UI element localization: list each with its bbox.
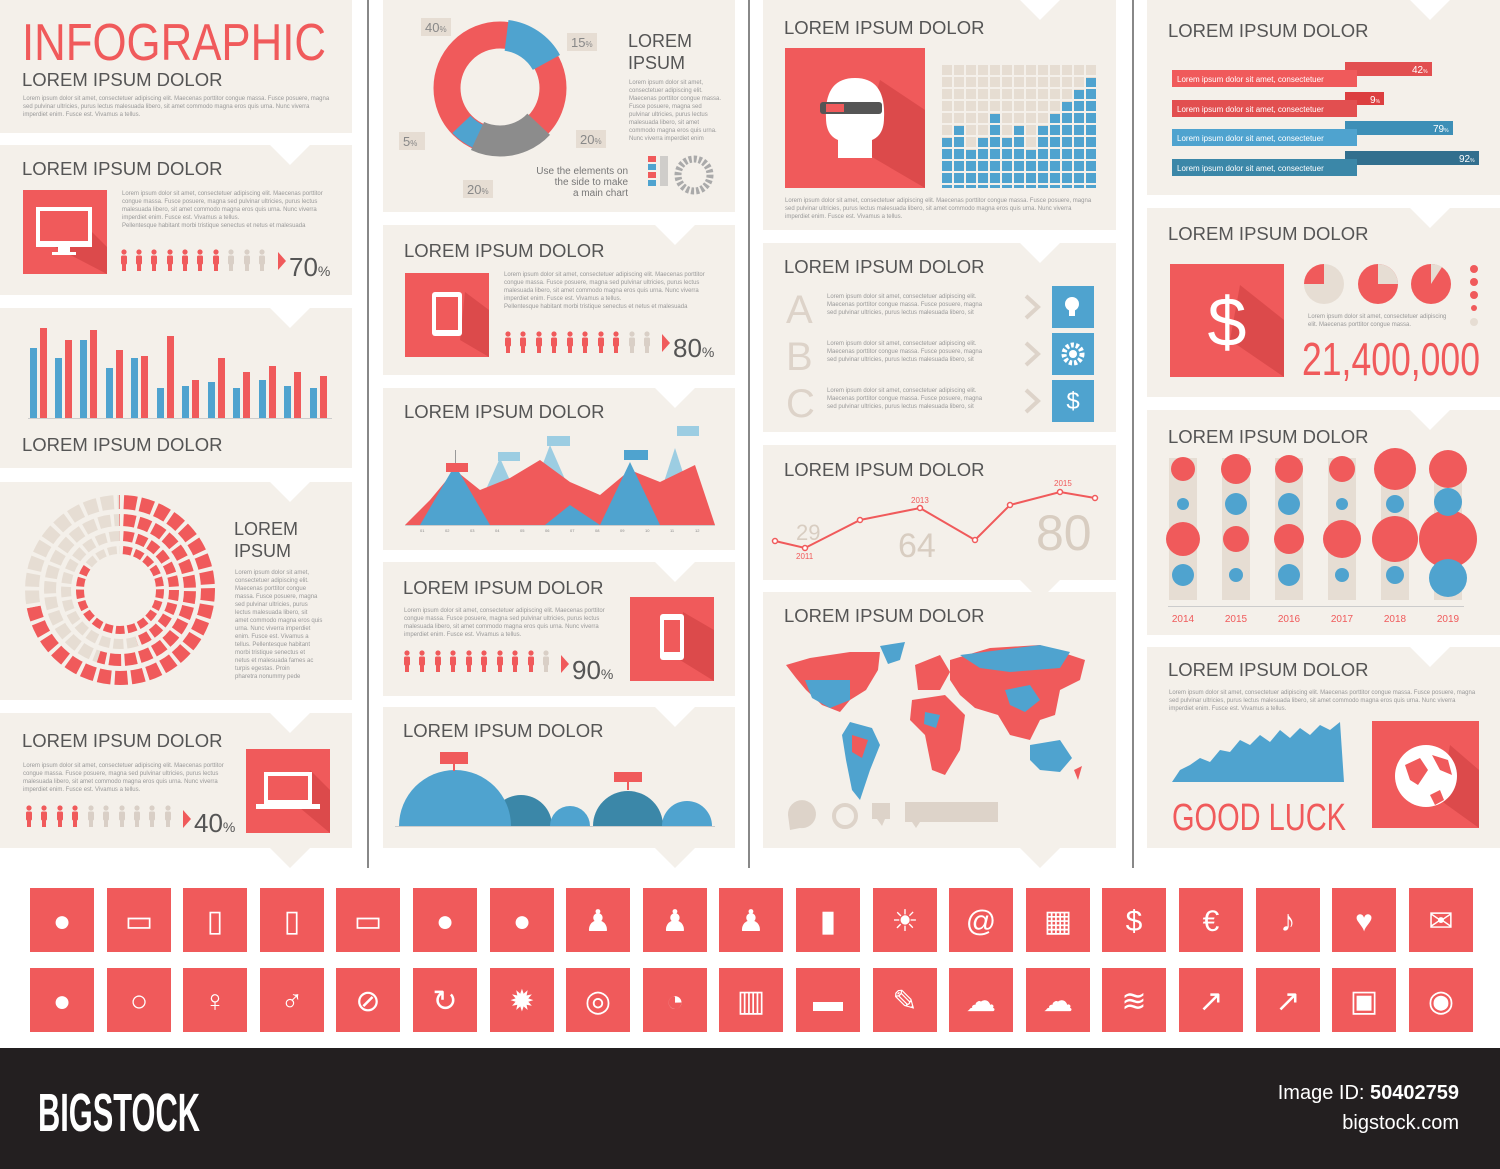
icon grid: row 1: ♥	[1355, 905, 1373, 938]
area chart: mountains: 02	[445, 528, 450, 533]
list items	[786, 286, 1094, 426]
pie charts	[1304, 264, 1478, 326]
list items: Maecenas porttitor congue massa. Fusce posuere, magna	[827, 349, 983, 355]
text block: consectetuer adipiscing elit.	[629, 88, 703, 94]
icon: tablet	[405, 273, 489, 357]
line chart: 2013	[911, 496, 929, 505]
subtitle: LOREM IPSUM DOLOR	[22, 69, 222, 90]
icon grid: row 1: ▯	[284, 905, 300, 938]
icon grid: row 1: ♟	[738, 905, 764, 938]
text block	[1308, 314, 1446, 328]
list items: Lorem ipsum dolor sit amet, consectetuer adipiscing elit.	[827, 294, 977, 300]
panel: monitor 70%	[0, 145, 352, 295]
bar list: Lorem ipsum dolor sit amet, consectetuer	[1177, 164, 1324, 173]
heading: LOREM IPSUM DOLOR	[784, 17, 984, 38]
icon grid: row 1: ●	[513, 905, 531, 938]
text block: pharetra nonummy pede	[235, 674, 301, 680]
good luck text: GOOD LUCK	[1172, 797, 1346, 839]
list items: B	[786, 335, 813, 379]
text block: malesuada libero, sit amet commodo magna eros quis urna. Nunc viverra	[23, 779, 218, 785]
mini elements	[648, 156, 710, 191]
heading: LOREM IPSUM DOLOR	[1168, 659, 1368, 680]
text block: imperdiet enim. Fusce est. Vivamus a tellus.	[23, 787, 141, 793]
text block	[785, 198, 1092, 220]
caption	[536, 166, 628, 199]
waffle chart	[942, 65, 1098, 188]
panel: hills chart	[383, 707, 735, 868]
panel: ABC list	[763, 243, 1116, 432]
bar chart	[28, 328, 332, 419]
icon grid: row 2: ▣	[1350, 985, 1378, 1018]
donut chart	[447, 35, 553, 141]
panel: world map	[763, 592, 1116, 868]
line chart: 2011	[796, 552, 814, 561]
heading: LOREM IPSUM DOLOR	[784, 459, 984, 480]
text block: Lorem ipsum dolor sit amet, consectetuer adipiscing elit. Maecenas porttitor congue massa. Fusce posuere, magna	[1169, 690, 1476, 696]
icon grid: row 1: ▭	[354, 905, 382, 938]
text block: Lorem ipsum dolor sit amet, consectetuer adipiscing elit. Maecenas porttitor	[23, 763, 224, 769]
donut labels: 15%	[571, 35, 593, 50]
text block: turpis egestas. Proin	[235, 666, 290, 672]
text block	[404, 608, 605, 638]
heading: LOREM IPSUM DOLOR	[1168, 20, 1368, 41]
bubble chart: 2016	[1278, 614, 1301, 625]
text block: Lorem ipsum dolor sit amet,	[629, 80, 703, 86]
icon grid: row 2: ◎	[585, 985, 611, 1018]
footer image id: Image ID: 50402759	[1278, 1082, 1459, 1104]
donut labels: 40%	[425, 20, 447, 35]
icon grid: row 2: ✎	[892, 985, 918, 1018]
caption: a main chart	[573, 188, 628, 199]
area chart: mountains: 12	[695, 528, 700, 533]
text block: malesuada libero, sit amet commodo magna eros quis urna. Nunc viverra	[122, 207, 317, 213]
icon grid: row 2: ♂	[281, 985, 303, 1018]
text block: morbi tristique senectus et	[235, 650, 305, 656]
text block: imperdiet enim. Fusce est. Vivamus a tellus.	[785, 214, 903, 220]
area chart: mountains: 07	[570, 528, 575, 533]
icon grid: row 1: ♟	[662, 905, 688, 938]
icon grid: row 1	[30, 888, 1473, 952]
text block: urna. Nunc viverra imperdiet	[235, 626, 311, 632]
area chart: mountains: 11	[670, 528, 675, 533]
bar list: 9%	[1370, 95, 1381, 106]
panel: dollar 21,400,000	[1147, 208, 1500, 397]
icon grid: row 2: ▥	[737, 985, 765, 1018]
list items: C	[786, 382, 815, 426]
icon grid: row 2: ⊘	[355, 985, 381, 1018]
area chart: mountains: 06	[545, 528, 550, 533]
donut labels	[399, 18, 606, 198]
text block: congue massa. Fusce posuere, magna sed pulvinar ultricies, purus lectus	[23, 771, 218, 777]
text block: congue massa. Fusce posuere, magna sed pulvinar ultricies, purus lectus	[504, 280, 699, 286]
heading: LOREM IPSUM DOLOR	[784, 256, 984, 277]
text block: Pellentesque habitant morbi tristique senectus et netus et malesuada	[122, 223, 306, 229]
text block: Lorem ipsum dolor sit amet, consectetuer adipiscing elit. Maecenas porttitor congue massa. Fusce posuere, magna	[785, 198, 1092, 204]
panel: donut chart	[383, 0, 735, 212]
people row 80%: 80%	[673, 333, 714, 363]
text block: imperdiet enim. Fusce est. Vivamus a tellus.	[404, 632, 522, 638]
body text: imperdiet enim. Fusce est. Vivamus a tellus.	[23, 112, 141, 118]
text block: imperdiet enim. Fusce est. Vivamus a tellus.	[1169, 706, 1287, 712]
bubble chart	[1166, 448, 1477, 625]
text block: amet commodo magna eros quis	[235, 618, 322, 624]
panel: concentric rings: IPSUM	[234, 541, 291, 561]
list items: sed pulvinar ultricies, purus lectus malesuada libero, sit	[827, 357, 974, 363]
icon grid: row 2: ◉	[1428, 985, 1454, 1018]
donut labels: 5%	[403, 134, 417, 149]
icon grid: row 1: ▦	[1044, 905, 1072, 938]
column dividers	[367, 0, 1134, 868]
heading: LOREM IPSUM DOLOR	[22, 434, 222, 455]
heading: LOREM IPSUM DOLOR	[22, 730, 222, 751]
icon grid: row 2	[30, 968, 1473, 1032]
icon: laptop	[246, 749, 330, 833]
icon grid: row 1: ▯	[207, 905, 223, 938]
line chart: 29	[796, 520, 820, 545]
text block: Lorem ipsum dolor sit amet, consectetuer adipiscing elit. Maecenas porttitor	[404, 608, 605, 614]
panel: bubble chart	[1147, 410, 1500, 635]
list items: $	[1066, 388, 1080, 415]
list items: Maecenas porttitor congue massa. Fusce posuere, magna	[827, 302, 983, 308]
bubble chart: 2018	[1384, 614, 1407, 625]
bubble chart: 2015	[1225, 614, 1248, 625]
caption: the side to make	[555, 177, 628, 188]
area chart: mountains: 10	[645, 528, 650, 533]
panel: bar chart	[0, 308, 352, 468]
icon grid: row 2: ✹	[509, 985, 535, 1018]
panel: phone 90%	[383, 562, 735, 696]
text block: malesuada libero, sit amet commodo magna eros quis urna. Nunc viverra	[404, 624, 599, 630]
world map	[786, 642, 1085, 800]
icon grid: row 1: ♟	[585, 905, 611, 938]
panel: head icon + waffle	[763, 0, 1116, 230]
heading: LOREM IPSUM DOLOR	[1168, 426, 1368, 447]
heading: LOREM IPSUM DOLOR	[403, 577, 603, 598]
list items: Lorem ipsum dolor sit amet, consectetuer adipiscing elit.	[827, 341, 977, 347]
bar list: 79%	[1433, 124, 1449, 135]
bar list: Lorem ipsum dolor sit amet, consectetuer	[1177, 134, 1324, 143]
text block: Lorem ipsum dolor sit amet,	[235, 570, 309, 576]
icon grid: row 2: ↗	[1198, 985, 1224, 1018]
area chart	[1172, 722, 1344, 782]
icon grid: row 1: ☀	[892, 905, 918, 938]
panel: tablet 80%	[383, 225, 735, 375]
text block: consectetuer adipiscing elit.	[235, 578, 309, 584]
text block	[235, 570, 322, 680]
icon grid: row 2: ☁	[966, 985, 996, 1018]
heading: LOREM IPSUM DOLOR	[404, 401, 604, 422]
icon grid: row 2: ☁	[1043, 985, 1073, 1018]
list items: Maecenas porttitor congue massa. Fusce posuere, magna	[827, 396, 983, 402]
text block: Lorem ipsum dolor sit amet, consectetuer adipiscing	[1308, 314, 1446, 320]
heading: LOREM	[628, 31, 692, 51]
icon: dollar: $	[1208, 283, 1246, 361]
heading: LOREM IPSUM DOLOR	[1168, 223, 1368, 244]
people row 40%	[26, 805, 235, 838]
list items: sed pulvinar ultricies, purus lectus malesuada libero, sit	[827, 404, 974, 410]
area chart: mountains	[405, 426, 715, 533]
text block: Fusce posuere, magna sed	[629, 104, 702, 110]
bar list: Lorem ipsum dolor sit amet, consectetuer	[1177, 105, 1324, 114]
text block: Pellentesque habitant morbi tristique senectus et netus et malesuada	[504, 304, 688, 310]
bubble chart: 2014	[1172, 614, 1195, 625]
icon: head with glasses	[785, 48, 925, 188]
title: INFOGRAPHIC	[22, 14, 326, 72]
donut labels: 20%	[467, 182, 489, 197]
icon grid: row 2: ○	[130, 985, 148, 1018]
heading: LOREM IPSUM DOLOR	[404, 240, 604, 261]
text block: Maecenas porttitor congue massa.	[629, 96, 721, 102]
caption: Use the elements on	[536, 166, 628, 177]
text block: tellus. Pellentesque habitant	[235, 642, 310, 648]
area chart: mountains: 05	[520, 528, 525, 533]
icon grid: row 2: ▬	[813, 985, 843, 1018]
text block: sed pulvinar ultricies, purus lectus malesuada libero, sit amet commodo magna eros quis urna. Nunc viverra	[1169, 698, 1456, 704]
text block: Lorem ipsum dolor sit amet, consectetuer adipiscing elit. Maecenas porttitor	[504, 272, 705, 278]
radial ring chart	[32, 502, 208, 678]
text block: imperdiet enim. Fusce est. Vivamus a tellus.	[122, 215, 240, 221]
text block	[122, 191, 323, 229]
bubble chart: 2019	[1437, 614, 1460, 625]
icon grid: row 1: ●	[53, 905, 71, 938]
people row 70%	[121, 249, 330, 282]
list items: A	[786, 288, 813, 332]
people row 80%	[505, 331, 714, 363]
body text	[23, 96, 330, 118]
panel: horizontal bars	[1147, 0, 1500, 195]
icon grid: row 2: ≋	[1121, 985, 1147, 1018]
text block: lectus malesuada libero, sit	[235, 610, 308, 616]
text block: malesuada libero, sit amet	[629, 120, 699, 126]
text block: congue massa. Fusce posuere, magna sed pulvinar ultricies, purus lectus	[404, 616, 599, 622]
people row 40%: 40%	[194, 808, 235, 838]
panel: donut chart: IPSUM	[628, 53, 685, 73]
text block: sed pulvinar ultricies, purus lectus malesuada libero, sit amet commodo magna eros quis urna. Nunc viverra	[785, 206, 1072, 212]
text block: netus et malesuada fames ac	[235, 658, 313, 664]
line chart	[772, 479, 1098, 565]
heading: LOREM IPSUM DOLOR	[22, 158, 222, 179]
text block	[629, 80, 721, 142]
text block: imperdiet enim. Fusce est. Vivamus a tellus.	[504, 296, 622, 302]
icon grid: row 2: ↗	[1275, 985, 1301, 1018]
heading: LOREM	[234, 519, 298, 539]
panel: infographic title	[0, 0, 352, 133]
icon grid: row 1: ●	[436, 905, 454, 938]
icon: dollar	[1170, 264, 1284, 377]
text block: Lorem ipsum dolor sit amet, consectetuer adipiscing elit. Maecenas porttitor	[122, 191, 323, 197]
text block: pulvinar ultricies, purus lectus	[629, 112, 708, 118]
text block: enim. Fusce est. Vivamus a	[235, 634, 309, 640]
text block: Maecenas porttitor congue	[235, 586, 307, 592]
bar list: 42%	[1412, 65, 1428, 76]
bubble chart: 2017	[1331, 614, 1354, 625]
text block: sed pulvinar ultricies, purus	[235, 602, 308, 608]
icon grid: row 1: ✉	[1428, 905, 1454, 938]
icon grid: row 1: @	[966, 905, 996, 938]
icon: monitor	[23, 190, 107, 274]
area chart: mountains: 01	[420, 528, 425, 533]
donut labels: 20%	[580, 132, 602, 147]
icon grid: row 2: ◔	[666, 985, 684, 1018]
icon: globe	[1372, 721, 1479, 828]
semicircle chart	[395, 752, 715, 827]
panel: mountain chart	[383, 388, 735, 550]
speech bubble icons	[788, 800, 998, 830]
bar list	[1172, 62, 1479, 176]
body text: Lorem ipsum dolor sit amet, consectetuer adipiscing elit. Maecenas porttitor congue massa. Fusce posuere, magna	[23, 96, 330, 102]
heading: LOREM IPSUM DOLOR	[784, 605, 984, 626]
bar list: 92%	[1459, 154, 1475, 165]
footer bar	[0, 1048, 1500, 1169]
panel: laptop 40%	[0, 713, 352, 868]
text block	[23, 763, 224, 793]
panel: good luck	[1147, 647, 1500, 848]
line chart: 64	[898, 527, 936, 565]
area chart: mountains: 04	[495, 528, 500, 533]
icon grid: row 1: ♪	[1280, 905, 1296, 938]
list items: Lorem ipsum dolor sit amet, consectetuer adipiscing elit.	[827, 388, 977, 394]
area chart: mountains: 03	[470, 528, 475, 533]
footer logo: BIGSTOCK	[38, 1083, 200, 1143]
icon grid: row 2: ↻	[432, 985, 458, 1018]
area chart: mountains: 08	[595, 528, 600, 533]
people row 70%: 70%	[289, 252, 330, 282]
heading: LOREM IPSUM DOLOR	[403, 720, 603, 741]
icon grid: row 2: ♀	[204, 985, 226, 1018]
icon grid: row 1: $	[1126, 905, 1143, 938]
area chart: mountains: 09	[620, 528, 625, 533]
text block	[1169, 690, 1476, 712]
icon grid: row 1: ▭	[125, 905, 153, 938]
text block: congue massa. Fusce posuere, magna sed pulvinar ultricies, purus lectus	[122, 199, 317, 205]
line chart: 2015	[1054, 479, 1072, 488]
footer url: bigstock.com	[1342, 1112, 1459, 1134]
list items: sed pulvinar ultricies, purus lectus malesuada libero, sit	[827, 310, 974, 316]
text block: Nunc viverra imperdiet enim	[629, 136, 704, 142]
panel: line chart	[763, 445, 1116, 600]
icon: phone	[630, 597, 714, 681]
people row 90%: 90%	[572, 655, 613, 685]
line chart: 80	[1036, 505, 1092, 561]
panel: concentric rings	[0, 482, 352, 700]
people row 90%	[404, 650, 613, 685]
body text: sed pulvinar ultricies, purus lectus malesuada libero, sit amet commodo magna eros quis urna. Nunc viverra	[23, 104, 310, 110]
text block: commodo magna eros quis urna.	[629, 128, 717, 134]
text block: malesuada libero, sit amet commodo magna eros quis urna. Nunc viverra	[504, 288, 699, 294]
text block: elit. Maecenas porttitor congue massa.	[1308, 322, 1411, 328]
icon grid: row 1: ▮	[820, 905, 836, 938]
text block: massa. Fusce posuere, magna	[235, 594, 318, 600]
icon grid: row 1: €	[1203, 905, 1220, 938]
icon grid: row 2: ●	[53, 985, 71, 1018]
text block	[504, 272, 705, 310]
bar list: Lorem ipsum dolor sit amet, consectetuer	[1177, 75, 1324, 84]
